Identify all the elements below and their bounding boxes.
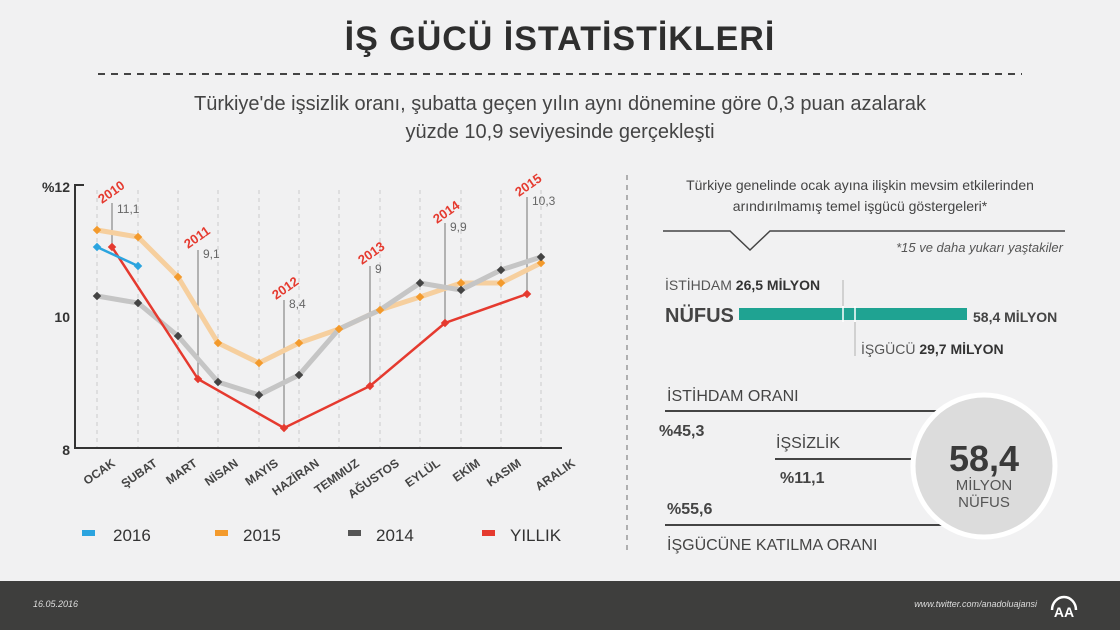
rates: İSTİHDAM ORANI [667,386,799,405]
footer: www.twitter.com/anadoluajansi [914,599,1038,609]
line chart: 11,1 [117,202,140,216]
population bar: İŞGÜCÜ 29,7 MİLYON [861,340,1004,357]
population bar [665,276,1057,357]
population bar: İSTİHDAM 26,5 MİLYON [665,276,820,293]
line chart: 10,3 [532,194,556,208]
circle badge: MİLYON [956,476,1012,494]
month labels: TEMMUZ [312,456,362,497]
population bar: 58,4 MİLYON [973,309,1057,325]
line chart: 9 [375,262,382,276]
series yıllık [112,247,527,428]
line chart: 2013 [355,239,387,267]
month labels: MART [163,456,200,487]
line chart: 2011 [181,223,213,251]
month labels: EKİM [450,455,483,485]
line chart: 2015 [512,171,544,199]
footnote: *15 ve daha yukarı yaştakiler [896,240,1064,255]
subtitle [194,93,927,143]
rates: %11,1 [780,470,825,487]
circle badge: NÜFUS [958,493,1010,511]
legend: 2016 [113,526,151,545]
population bar: NÜFUS [665,304,734,327]
icon: AA logo [1052,597,1076,620]
subtitle: yüzde 10,9 seviyesinde gerçekleşti [405,121,715,143]
month labels: EYLÜL [402,455,443,490]
series 2014 [97,257,541,395]
rates: %55,6 [667,501,712,518]
year annotation lines [112,197,527,428]
month labels: OCAK [81,456,118,488]
line chart [42,171,578,501]
line chart: 2014 [430,197,463,226]
legend: YILLIK [510,526,562,545]
legend [82,526,562,545]
line chart: 9,1 [203,247,220,261]
line chart: 9,9 [450,220,467,234]
series 2015 [97,230,541,363]
right panel heading: arındırılmamış temel işgücü göstergeleri* [733,198,988,214]
legend: 2015 [243,526,281,545]
series 2016 [97,247,138,266]
rates: İŞGÜCÜNE KATILMA ORANI [667,535,877,554]
line chart: 2012 [269,274,301,302]
right panel heading [686,177,1034,214]
month labels: MAYIS [242,456,281,489]
title: İŞ GÜCÜ İSTATİSTİKLERİ [345,20,775,58]
line chart: 10 [54,309,70,325]
month labels: ŞUBAT [119,456,160,491]
footer [0,581,1120,630]
circle badge [913,395,1055,537]
month labels: ARALIK [533,456,578,493]
month labels [81,455,578,501]
subtitle: Türkiye'de işsizlik oranı, şubatta geçen yılın aynı dönemine göre 0,3 puan azalarak [194,93,927,115]
line chart: 8,4 [289,297,306,311]
line chart: 8 [62,442,70,458]
rates: %45,3 [659,423,704,440]
icon: AA logo: AA [1054,604,1074,620]
legend: 2014 [376,526,414,545]
line chart: 2010 [95,178,127,206]
month labels: NİSAN [202,455,241,489]
footer: 16.05.2016 [33,599,78,609]
line chart: %12 [42,179,70,195]
month labels: HAZİRAN [269,455,322,498]
rates [659,386,960,554]
month labels: KASIM [484,456,524,490]
rates: İŞSİZLİK [776,433,840,452]
right panel heading: Türkiye genelinde ocak ayına ilişkin mevsim etkilerinden [686,177,1034,193]
month labels: AĞUSTOS [345,455,402,501]
circle badge: 58,4 [949,438,1019,479]
